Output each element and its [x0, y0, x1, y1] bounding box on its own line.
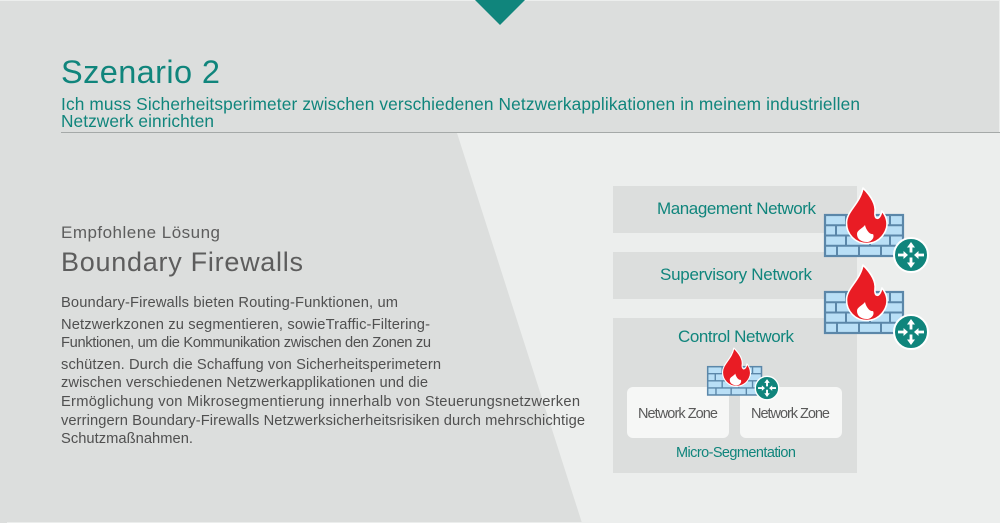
right edge strip — [999, 0, 1000, 133]
pointer triangle — [475, 0, 525, 25]
network diagram — [613, 186, 928, 473]
body text: Funktionen, um die Kommunikation zwischen den Zonen zu — [61, 335, 431, 351]
panel: control network — [613, 318, 857, 473]
panel: control network: Control Network — [678, 327, 794, 346]
micro-segmentation label: Micro-Segmentation — [676, 445, 796, 461]
body text: schützen. Durch die Schaffung von Sicherheitsperimetern — [61, 357, 441, 373]
body text: zwischen verschiedenen Netzwerkapplikationen und die — [61, 375, 428, 391]
network zone left: Network Zone — [638, 406, 718, 422]
body text: Boundary-Firewalls bieten Routing-Funktionen, um — [61, 295, 398, 311]
panel: supervisory network: Supervisory Network — [660, 265, 812, 284]
panel: management network: Management Network — [657, 199, 816, 218]
icon: firewall management — [825, 188, 928, 272]
heading: Boundary Firewalls: Boundary Firewalls — [61, 247, 303, 277]
solution text panel — [61, 223, 585, 447]
background: light slanted right area — [457, 133, 1000, 523]
network zone left — [627, 387, 729, 438]
title: Szenario 2 — [61, 54, 220, 90]
icon: firewall supervisory — [825, 265, 928, 349]
header — [61, 54, 860, 131]
bottom edge strip — [7, 522, 1000, 523]
network zone right: Network Zone — [751, 406, 830, 422]
subtitle: Ich muss Sicherheitsperimeter zwischen verschiedenen Netzwerkapplikationen in meinem industriellen — [61, 94, 860, 114]
body text: Schutzmaßnahmen. — [61, 431, 193, 447]
body text: verringern Boundary-Firewalls Netzwerksicherheitsrisiken durch mehrschichtige — [61, 413, 585, 429]
body text: Ermöglichung von Mikrosegmentierung innerhalb von Steuerungsnetzwerken — [61, 394, 580, 410]
body text: Netzwerkzonen zu segmentieren, sowieTraffic-Filtering- — [61, 317, 430, 333]
kicker: recommended solution: Empfohlene Lösung — [61, 223, 220, 242]
icon: firewall control — [708, 348, 779, 400]
panel: supervisory network — [613, 252, 857, 299]
panel: management network — [613, 186, 857, 233]
header rule — [61, 132, 1000, 133]
top edge strip — [0, 0, 1000, 1]
subtitle: Netzwerk einrichten — [61, 111, 214, 131]
network zone right — [740, 387, 842, 438]
